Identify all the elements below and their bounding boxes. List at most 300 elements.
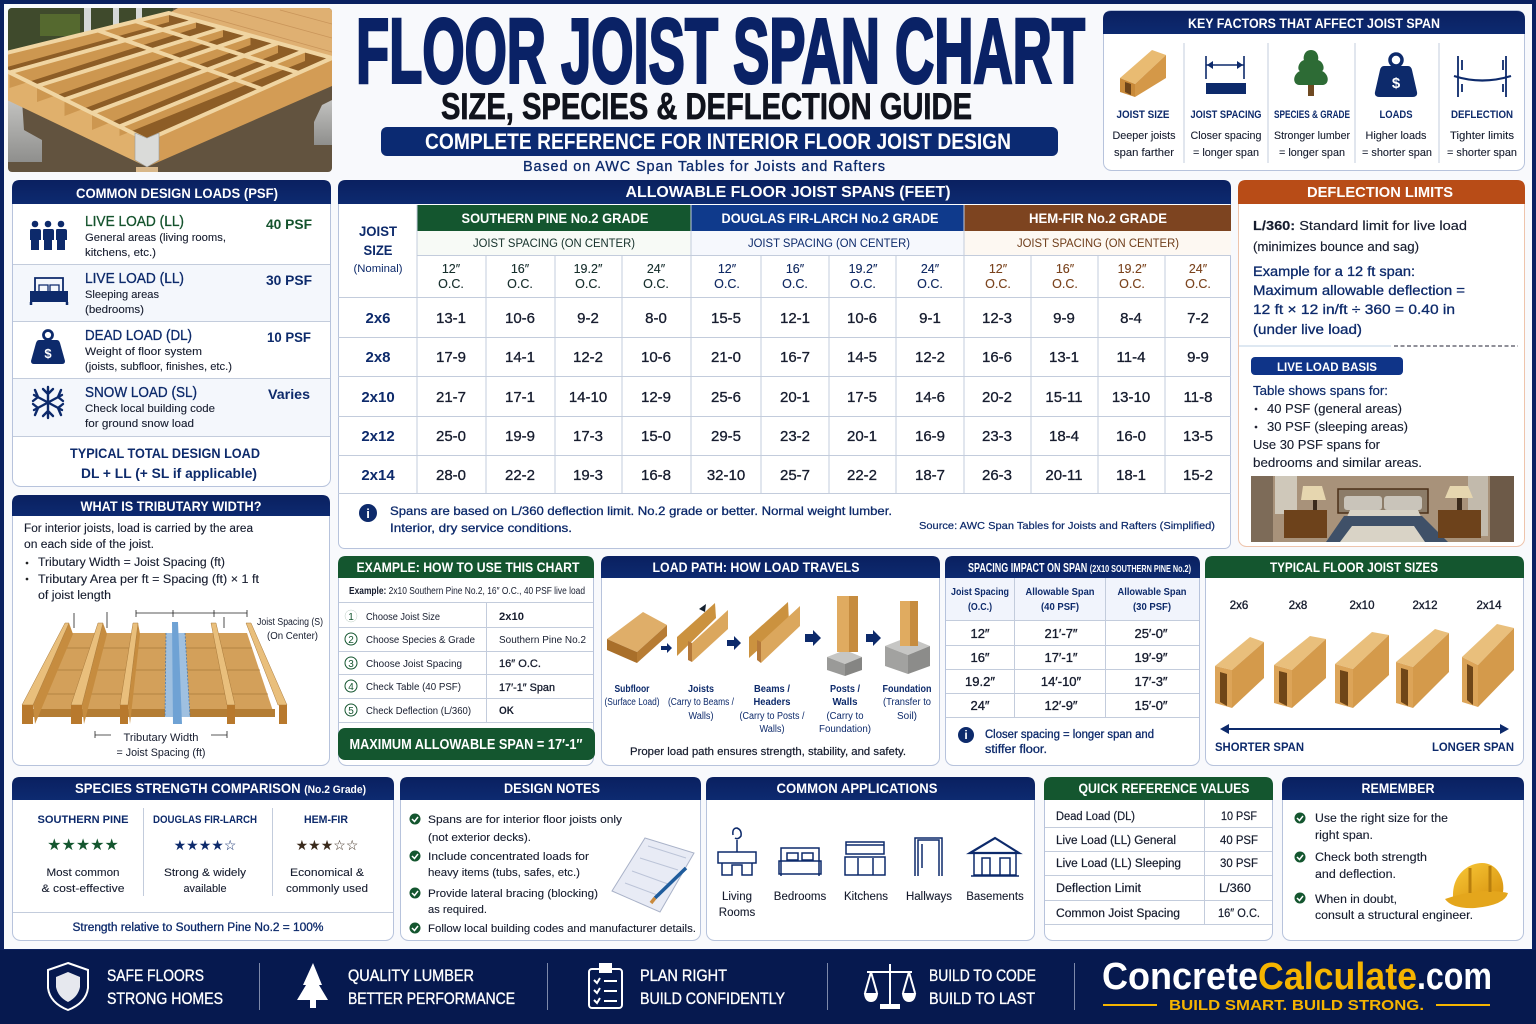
lumber 2x8 (1274, 636, 1326, 708)
row 2x10: 17-5 (847, 389, 877, 406)
tributary heading (12, 495, 330, 516)
source line: Based on AWC Span Tables for Joists and Rafters (523, 159, 885, 175)
row: live load general: 40 PSF (266, 217, 312, 232)
row 2x8: 12-2 (915, 349, 945, 366)
row 2x6: 10-6 (847, 310, 877, 327)
load path labels: (Carry to Beams / (668, 697, 734, 708)
lumber 2x6 (1215, 637, 1264, 708)
note 3: Provide lateral bracing (blocking) (428, 888, 598, 900)
row 2x10: 11-8 (1184, 389, 1212, 406)
quick reference rows: Live Load (LL) General (1056, 835, 1176, 847)
spacing labels: O.C. (575, 277, 601, 291)
species: hem-fir (286, 814, 368, 895)
worked example: Example for a 12 ft span: (1253, 264, 1415, 279)
remember heading (1282, 777, 1524, 800)
icon: tree (1294, 50, 1328, 96)
row 2x10: 14-10 (569, 389, 607, 406)
row 2x14: 22-2 (847, 467, 877, 484)
factor 3: SPECIES & GRADE (1274, 109, 1350, 121)
factor 1: span farther (1114, 147, 1174, 159)
table notes: Interior, dry service conditions. (390, 521, 572, 535)
panel: typical joist sizes (1205, 556, 1524, 766)
label: Basements (966, 891, 1024, 903)
icon: info: i (366, 506, 370, 521)
factor 3 (1274, 109, 1350, 159)
row: snow load: Varies (268, 386, 310, 402)
spacing labels: 12″ (989, 262, 1008, 276)
row 2x12: 15-0 (641, 428, 671, 445)
arrow (866, 630, 881, 646)
spacing labels: O.C. (438, 277, 464, 291)
panel: key factors (1103, 10, 1525, 170)
arrow (661, 643, 672, 653)
arrow (805, 630, 821, 646)
arrow: span direction (1220, 724, 1509, 734)
label: Hallways (906, 891, 952, 903)
note 1: Spans are for interior floor joists only (428, 814, 623, 826)
quick reference heading: QUICK REFERENCE VALUES (1078, 781, 1250, 796)
species: southern pine (38, 814, 128, 895)
brand tagline: BUILD SMART. BUILD STRONG. (1169, 997, 1424, 1014)
panel: species comparison (12, 777, 394, 940)
row 2x8: 13-1 (1049, 349, 1079, 366)
row 2x8: 11-4 (1117, 349, 1145, 366)
icon: bedroom (779, 848, 821, 876)
row 2x6: 15-5 (711, 310, 741, 327)
slogan 3 (640, 966, 785, 1008)
load path labels: Headers (754, 697, 791, 708)
spacing labels: O.C. (850, 277, 876, 291)
icon: kitchen (845, 842, 885, 875)
worked example: (under live load) (1253, 322, 1362, 337)
species: southern pine: ★★★★★ (47, 837, 119, 854)
load path labels: Foundation (882, 684, 932, 695)
subtitle: SIZE, SPECIES & DEFLECTION GUIDE (441, 86, 972, 127)
icon: shield (48, 963, 88, 1010)
icon: post (827, 596, 862, 676)
slogan 4 (929, 966, 1036, 1008)
slogan 4: BUILD TO LAST (929, 989, 1035, 1008)
note 2 (410, 850, 589, 879)
spacing labels: O.C. (1185, 277, 1211, 291)
spacing labels: 16″ (1056, 262, 1075, 276)
spacing labels: 12″ (718, 262, 737, 276)
load path labels: (Carry to Posts / (740, 711, 805, 722)
example heading: EXAMPLE: HOW TO USE THIS CHART (356, 560, 580, 575)
callout: joist spacing (257, 617, 323, 642)
item 2 (1294, 852, 1427, 881)
step 5 (345, 704, 514, 717)
brand logo: Concrete (1102, 956, 1258, 998)
factor 1: JOIST SIZE (1116, 109, 1170, 121)
size labels: 2x10 (1350, 600, 1374, 612)
icon: people (30, 221, 67, 250)
step 3: 16″ O.C. (499, 658, 541, 670)
spacing labels: 19.2″ (849, 262, 878, 276)
spacing labels: O.C. (1052, 277, 1078, 291)
item 1: right span. (1315, 830, 1373, 842)
load path labels: (Carry to (826, 711, 864, 722)
spacing impact heading: SPACING IMPACT ON SPAN (2X10 SOUTHERN PINE No.2) (968, 560, 1191, 575)
slogan 2: QUALITY LUMBER (348, 966, 474, 985)
panel: remember (1282, 777, 1524, 940)
factor 4 (1362, 109, 1432, 159)
spacing labels: O.C. (985, 277, 1011, 291)
icon: snowflake (33, 387, 63, 418)
L/360 definition: (minimizes bounce and sag) (1253, 239, 1419, 254)
side faces of joists (0, 13, 305, 136)
species: douglas fir: DOUGLAS FIR-LARCH (153, 814, 257, 826)
sizes heading (1205, 556, 1524, 578)
brand logo: Calculate (1258, 956, 1417, 998)
callout: tributary width: Tributary Width (124, 732, 198, 744)
row 2x14: 19-3 (573, 467, 603, 484)
panel: common design loads (12, 180, 331, 486)
item 3 (1294, 892, 1473, 922)
row 2x10: 13-10 (1112, 389, 1150, 406)
hem-fir header: HEM-FIR No.2 GRADE (1029, 210, 1167, 226)
spacing labels: 24″ (921, 262, 940, 276)
row 2x12: 23-3 (982, 428, 1012, 445)
deflection heading (1238, 180, 1525, 204)
step 5: OK (499, 705, 514, 717)
species heading: SPECIES STRENGTH COMPARISON (No.2 Grade) (75, 780, 366, 796)
spacing note: stiffer floor. (985, 744, 1047, 756)
step 2: Southern Pine No.2 (499, 634, 586, 646)
factor 4: = shorter span (1362, 147, 1432, 159)
notes heading (400, 777, 701, 800)
row 2x12: 13-5 (1183, 428, 1213, 445)
icon: joists (677, 603, 728, 662)
icon: joist beam (1120, 50, 1166, 97)
icon: spacing (1206, 56, 1246, 94)
row 2x14: 32-10 (707, 467, 745, 484)
load path labels: Posts / (830, 684, 860, 695)
row 2x8: 10-6 (641, 349, 671, 366)
item 3: When in doubt, (1315, 894, 1397, 906)
row 2x12: 17-3 (573, 428, 603, 445)
label (719, 891, 755, 919)
spacing rows: 15′-0″ (1134, 698, 1168, 713)
load path labels: Subfloor (614, 684, 650, 695)
note 2: Include concentrated loads for (428, 851, 589, 863)
step 1: 1 (348, 612, 354, 623)
load path labels: Walls (832, 697, 858, 708)
column headers: (O.C.) (968, 601, 992, 613)
row: live load general: General areas (living rooms, (85, 232, 226, 244)
quick reference rows: 40 PSF (1220, 835, 1258, 847)
icon: weight (31, 330, 65, 364)
notes heading: DESIGN NOTES (504, 781, 600, 796)
note 1 (410, 814, 623, 844)
size labels: 2x6 (1230, 600, 1248, 612)
brand logo: .com (1417, 956, 1492, 998)
slogan 3: BUILD CONFIDENTLY (640, 989, 785, 1008)
row 2x14: 26-3 (982, 467, 1012, 484)
row 2x8: 12-2 (573, 349, 603, 366)
row 2x14: 22-2 (505, 467, 535, 484)
row: live load general (30, 214, 312, 259)
factor 2: = longer span (1193, 147, 1259, 159)
row 2x6: 9-9 (1053, 310, 1075, 327)
row 2x10: 20-1 (780, 389, 810, 406)
deflection heading: DEFLECTION LIMITS (1307, 184, 1453, 201)
row 2x6: 7-2 (1187, 310, 1209, 327)
spacing labels: 24″ (1189, 262, 1208, 276)
quick reference heading (1044, 777, 1273, 800)
panel: quick reference (1044, 777, 1273, 940)
column headers: Allowable Span (1026, 586, 1094, 598)
species heading (12, 777, 394, 800)
step 2: 2 (348, 635, 354, 646)
douglas fir header: JOIST SPACING (ON CENTER) (748, 238, 910, 250)
slogan 1 (107, 966, 223, 1008)
key factors heading (1103, 11, 1525, 34)
remember heading: REMEMBER (1362, 781, 1435, 796)
step 5: 5 (348, 706, 354, 717)
species: douglas fir: available (184, 883, 226, 895)
spacing labels: O.C. (917, 277, 943, 291)
species: southern pine: Most common (46, 867, 120, 879)
factor 3: Stronger lumber (1274, 130, 1350, 142)
icon: weight: $ (1392, 75, 1401, 92)
factor 2: Closer spacing (1190, 130, 1262, 142)
tributary text: For interior joists, load is carried by the area (24, 523, 254, 535)
spacing rows: 14′-10″ (1041, 674, 1082, 689)
row 2x10: 15-11 (1045, 389, 1083, 406)
panel: how to use example (338, 556, 595, 766)
row 2x14: 18-7 (915, 467, 945, 484)
shorter span label: SHORTER SPAN (1215, 740, 1304, 754)
tributary text: Tributary Width = Joist Spacing (ft) (38, 557, 225, 569)
icon: hard hat (1445, 863, 1508, 908)
row 2x8: 14-1 (505, 349, 535, 366)
step 4: Check Table (40 PSF) (366, 681, 461, 693)
column headers: (40 PSF) (1041, 601, 1079, 613)
row: live load sleeping: (bedrooms) (85, 304, 144, 316)
step 2 (345, 633, 586, 646)
factor 5: Tighter limits (1450, 130, 1515, 142)
joist size column header: (Nominal) (354, 263, 402, 275)
row: live load sleeping: 30 PSF (266, 273, 312, 288)
worked example: 12 ft × 12 in/ft ÷ 360 = 0.40 in (1253, 302, 1455, 317)
item 2: and deflection. (1315, 869, 1396, 881)
row 2x14: 2x14 (361, 467, 395, 484)
row 2x6: 9-2 (577, 310, 599, 327)
example heading (338, 556, 594, 578)
table notes: Spans are based on L/360 deflection limit. No.2 grade or better. Normal weight lumber. (390, 504, 892, 518)
step 3: 3 (348, 659, 354, 670)
row 2x10: 21-7 (436, 389, 466, 406)
factor 3: = longer span (1279, 147, 1345, 159)
step 4 (345, 680, 555, 694)
step 1: 2x10 (499, 611, 524, 623)
live load text: bedrooms and similar areas. (1253, 456, 1422, 470)
load path labels: Walls) (688, 711, 714, 722)
spacing labels: 16″ (511, 262, 530, 276)
quick reference rows: 16″ O.C. (1218, 908, 1260, 920)
step 5: Check Deflection (L/360) (366, 705, 471, 717)
row 2x12: 20-1 (847, 428, 877, 445)
result bar: MAXIMUM ALLOWABLE SPAN = 17′-1″ (350, 737, 583, 753)
icon: bed (30, 278, 68, 305)
result bar (338, 728, 595, 760)
row 2x12: 2x12 (361, 428, 395, 445)
row 2x6 (365, 310, 1209, 327)
spacing labels (438, 262, 1211, 291)
row 2x10: 12-9 (641, 389, 671, 406)
row: snow load: for ground snow load (85, 418, 194, 430)
row 2x12: 25-0 (436, 428, 466, 445)
row 2x8: 17-9 (436, 349, 466, 366)
species: southern pine: SOUTHERN PINE (38, 814, 128, 826)
row 2x10: 25-6 (711, 389, 741, 406)
step 2: Choose Species & Grade (366, 634, 475, 646)
row 2x6: 9-1 (919, 310, 941, 327)
callout: joist spacing: (On Center) (267, 631, 318, 642)
quick reference rows: L/360 (1219, 883, 1251, 895)
panel: spacing impact (945, 556, 1200, 766)
row 2x6: 8-0 (645, 310, 667, 327)
factor 4: Higher loads (1366, 130, 1427, 142)
spacing rows (965, 626, 1168, 713)
icon: weight: $ (44, 346, 52, 361)
spacing rows: 19.2″ (965, 674, 995, 689)
row: dead load: Weight of floor system (85, 346, 202, 358)
banner: complete reference: COMPLETE REFERENCE FOR INTERIOR FLOOR JOIST DESIGN (425, 129, 1011, 154)
live load text: Use 30 PSF spans for (1253, 438, 1380, 452)
icon: checklist (589, 964, 622, 1008)
icon: basement house (970, 838, 1019, 876)
worked example: Maximum allowable deflection = (1253, 283, 1465, 298)
panel: common applications (706, 777, 1035, 940)
row 2x12: 29-5 (711, 428, 741, 445)
row 2x12: 23-2 (780, 428, 810, 445)
icon: tree (297, 963, 328, 1008)
longer span label: LONGER SPAN (1432, 740, 1514, 754)
panel: tributary width (12, 495, 330, 766)
icon: beams (749, 602, 800, 663)
tributary text: of joist length (38, 590, 111, 602)
factor 4: LOADS (1380, 109, 1412, 121)
factor 1: Deeper joists (1112, 130, 1176, 142)
item 1 (1294, 812, 1448, 842)
row 2x12: 16-0 (1116, 428, 1146, 445)
joist size column header: JOIST (359, 223, 397, 239)
factor 2: JOIST SPACING (1190, 109, 1262, 121)
total design load: TYPICAL TOTAL DESIGN LOAD (70, 445, 260, 461)
douglas fir header (691, 205, 964, 256)
slogan 1: SAFE FLOORS (107, 966, 204, 985)
live load basis pill (1251, 357, 1403, 375)
design loads heading (12, 180, 331, 204)
spacing labels: O.C. (507, 277, 533, 291)
row 2x10: 17-1 (505, 389, 535, 406)
row: dead load (31, 328, 311, 373)
lumber 2x10 (1335, 632, 1389, 708)
icon: scales (865, 964, 915, 1008)
note 3 (410, 888, 598, 916)
note 2: heavy items (tubs, safes, etc.) (428, 867, 580, 879)
table heading: ALLOWABLE FLOOR JOIST SPANS (FEET) (626, 184, 950, 201)
spacing labels: O.C. (782, 277, 808, 291)
spacing labels: O.C. (643, 277, 669, 291)
label: Kitchens (844, 891, 888, 903)
spacing labels: 24″ (647, 262, 666, 276)
quick reference rows: 10 PSF (1221, 811, 1257, 823)
factor 2 (1190, 109, 1262, 159)
table heading (338, 180, 1231, 204)
spacing rows: 16″ (970, 650, 990, 665)
row 2x6: 12-3 (982, 310, 1012, 327)
quick reference rows: Dead Load (DL) (1056, 811, 1135, 823)
live load text (1253, 384, 1422, 470)
size labels: 2x14 (1477, 600, 1502, 612)
row 2x6: 2x6 (365, 310, 391, 327)
size labels: 2x8 (1289, 600, 1307, 612)
quick reference rows (1056, 811, 1260, 920)
row 2x10: 14-6 (915, 389, 945, 406)
load path labels: (Surface Load) (604, 697, 660, 708)
hem-fir header: JOIST SPACING (ON CENTER) (1017, 238, 1179, 250)
row 2x8 (365, 349, 1209, 366)
row 2x8: 16-7 (780, 349, 810, 366)
row: dead load: DEAD LOAD (DL) (85, 328, 192, 344)
row: live load sleeping: Sleeping areas (85, 289, 159, 301)
row 2x14: 15-2 (1183, 467, 1213, 484)
row: live load sleeping (30, 271, 312, 316)
label: Living (722, 891, 752, 903)
row 2x14: 25-7 (780, 467, 810, 484)
label: Bedrooms (774, 891, 826, 903)
row: snow load: SNOW LOAD (SL) (85, 385, 197, 401)
row 2x10: 20-2 (982, 389, 1012, 406)
panel: load path (601, 556, 940, 766)
callout: joist spacing: Joist Spacing (S) (257, 617, 323, 628)
douglas fir header: DOUGLAS FIR-LARCH No.2 GRADE (722, 210, 938, 226)
slogan 3: PLAN RIGHT (640, 966, 727, 985)
spacing rows: 21′-7″ (1044, 626, 1078, 641)
row 2x6: 12-1 (780, 310, 810, 327)
quick reference rows: Live Load (LL) Sleeping (1056, 858, 1181, 870)
load path heading: LOAD PATH: HOW LOAD TRAVELS (652, 560, 860, 575)
icon: hallway (915, 838, 942, 876)
row 2x6: 13-1 (436, 310, 466, 327)
load path labels: Soil) (897, 711, 917, 722)
spacing labels: O.C. (714, 277, 740, 291)
spacing note: Closer spacing = longer span and (985, 729, 1154, 741)
live load text: 40 PSF (general areas) (1267, 402, 1402, 416)
icon: info (359, 504, 377, 522)
key factors heading: KEY FACTORS THAT AFFECT JOIST SPAN (1188, 15, 1440, 31)
row: live load general: LIVE LOAD (LL) (85, 214, 184, 230)
row 2x8: 21-0 (711, 349, 741, 366)
tributary text: on each side of the joist. (24, 539, 154, 551)
applications heading (706, 777, 1035, 800)
slogan 2 (348, 966, 515, 1008)
live load basis pill: LIVE LOAD BASIS (1277, 360, 1377, 374)
table source: Source: AWC Span Tables for Joists and Rafters (Simplified) (919, 520, 1215, 532)
row: snow load: Check local building code (85, 403, 215, 415)
panel: deflection limits (1238, 180, 1525, 546)
factor 5: DEFLECTION (1451, 109, 1513, 121)
icon: deflection (1454, 56, 1511, 97)
row: live load sleeping: LIVE LOAD (LL) (85, 271, 184, 287)
row: live load general: kitchens, etc.) (85, 247, 156, 259)
table notes (390, 504, 892, 535)
row 2x14: 20-11 (1045, 467, 1083, 484)
icon: foundation (885, 601, 930, 674)
